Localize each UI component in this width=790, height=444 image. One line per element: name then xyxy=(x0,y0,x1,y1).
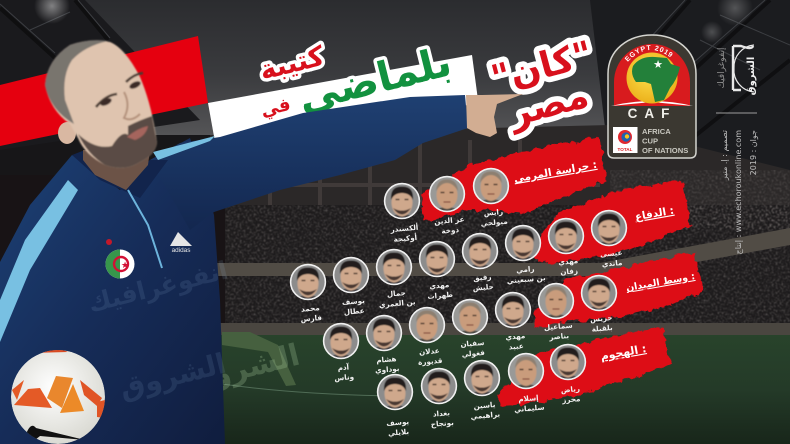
white banner xyxy=(208,55,478,142)
player: Adam Ounas xyxy=(323,323,359,383)
cup ball xyxy=(626,52,678,104)
player: Mohamed Fares: محمد xyxy=(301,303,320,314)
collar xyxy=(72,150,168,198)
player: Djamel Benlamri: بن العمري xyxy=(378,297,416,309)
player: Adam Ounas: آدم xyxy=(337,361,350,372)
zip xyxy=(128,190,162,268)
player: Djamel Benlamri xyxy=(376,249,416,309)
heading: حراسة المرمى : xyxy=(513,159,598,185)
football xyxy=(11,345,105,444)
player: Youcef Atal xyxy=(333,257,369,317)
title word: misr: مصر xyxy=(503,75,593,136)
heading: الهجوم : xyxy=(599,342,647,363)
player: Yacine Brahimi xyxy=(464,360,501,421)
player: Alexandre Oukidja: ألكسندر xyxy=(389,223,419,234)
coach figure xyxy=(0,40,523,444)
Algeria badge xyxy=(105,250,134,278)
shoulder stripe xyxy=(0,180,78,342)
player: Rais Mbolhi: رايس xyxy=(483,207,503,218)
player: Riyad Mahrez: رياض xyxy=(560,384,580,395)
player: Islam Slimani xyxy=(508,353,545,414)
EGYPT 2019 xyxy=(626,50,678,64)
arm stripe xyxy=(153,136,215,160)
player: Baghdad Bounedjah: بونجاح xyxy=(430,418,454,429)
Africa Cup of Nations label: AFRICA xyxy=(642,127,671,136)
player: Adlene Guedioura: عدلان xyxy=(419,346,440,357)
player: Haris Belkebla: حريس xyxy=(590,313,613,324)
adidas logo xyxy=(170,232,192,254)
player: Alexandre Oukidja xyxy=(384,183,420,244)
ear xyxy=(58,122,76,144)
player: Mohamed Fares: فارس xyxy=(300,313,323,324)
credit: date: جوان : 2019 xyxy=(749,130,758,175)
player: Mehdi Tahrat: مهدي xyxy=(429,280,450,291)
red brush stroke xyxy=(535,252,704,328)
neck xyxy=(83,150,150,190)
player: Sofiane Feghouli: سفيان xyxy=(460,338,485,349)
player: Yacine Brahimi: ياسين xyxy=(473,400,496,411)
logo text: infographic: إنفوغرافيك xyxy=(717,48,727,88)
player: Mehdi Zeffane xyxy=(548,218,584,277)
player: Yacine Brahimi: براهيمي xyxy=(470,410,501,421)
player: Ramy Bensebaini: بن سبعيني xyxy=(506,273,546,286)
player: Mehdi Abeid xyxy=(495,292,531,352)
heading: الدفاع : xyxy=(634,205,675,223)
watermark on pitch: الشروق xyxy=(182,338,303,400)
title: CAN Egypt xyxy=(487,34,597,136)
credit: production: إنتاج : www.echoroukonline.com xyxy=(734,130,744,254)
player: Rafik Halliche xyxy=(462,233,498,293)
credit: design: تصميم : إ. منير xyxy=(720,130,730,181)
player: Youcef Belaili: يوسف xyxy=(386,417,410,428)
watermark: الشروق xyxy=(116,347,229,405)
player: Youcef Atal: عطال xyxy=(343,306,365,317)
credits xyxy=(720,130,758,254)
player: Youcef Belaili xyxy=(377,374,413,438)
player: Azzedine Doukha: عز الدين xyxy=(434,215,465,226)
player: Ramy Bensebaini: رامي xyxy=(516,264,535,275)
player: Haris Belkebla: بلقبلة xyxy=(591,323,613,334)
player: Ismael Bennacer: بناصر xyxy=(548,331,570,342)
Africa Cup of Nations label: OF NATIONS xyxy=(642,146,688,155)
red brush stroke xyxy=(420,137,606,222)
title word: katiba: كتيبة xyxy=(257,41,328,87)
nose xyxy=(124,92,140,119)
player: Azzedine Doukha: دوخة xyxy=(441,225,460,236)
player: Islam Slimani: إسلام xyxy=(518,393,539,404)
watermark: انفوغرافيك xyxy=(85,255,231,319)
player: Mohamed Fares xyxy=(290,264,326,324)
Africa Cup of Nations label: CUP xyxy=(642,136,658,146)
player: Mehdi Abeid: مهدي xyxy=(505,331,526,342)
beard xyxy=(78,116,157,168)
title word: in: في xyxy=(259,94,293,121)
hair xyxy=(45,40,108,124)
player: Hicham Boudaoui: هشام xyxy=(376,354,397,365)
star: ★ xyxy=(653,59,663,71)
player: Azzedine Doukha xyxy=(429,176,466,236)
player: Haris Belkebla xyxy=(581,275,617,334)
player: Sofiane Feghouli: فغولي xyxy=(461,348,485,359)
player: Adlene Guedioura: قديورة xyxy=(418,356,443,367)
section: defence xyxy=(290,179,691,324)
adidas logo: adidas xyxy=(172,247,190,254)
player: Rais Mbolhi xyxy=(473,168,509,228)
player: Youcef Atal: يوسف xyxy=(342,296,365,307)
logo: CAF Africa Cup of Nations xyxy=(607,34,697,159)
player: Youcef Belaili: بلايلي xyxy=(388,427,410,438)
player: Djamel Benlamri: جمال xyxy=(386,288,406,299)
logo: CAF Africa Cup of Nations: EGYPT 2019 xyxy=(624,45,672,62)
player: Aissa Mandi: ماندي xyxy=(601,258,623,269)
player: Mehdi Zeffane: مهدي xyxy=(558,256,579,267)
player: Hicham Boudaoui: بوداوي xyxy=(375,364,400,375)
red banner xyxy=(0,36,208,146)
Africa map xyxy=(632,57,680,102)
title xyxy=(257,37,456,122)
mouth xyxy=(127,126,148,140)
section: midfield xyxy=(323,252,704,383)
player: Mehdi Tahrat: طهرات xyxy=(427,290,454,301)
pointing arm xyxy=(150,95,468,230)
player: Mehdi Tahrat xyxy=(419,241,455,301)
player: Riyad Mahrez xyxy=(550,344,586,405)
logo mark xyxy=(733,46,753,90)
player: Baghdad Bounedjah: بغداد xyxy=(433,408,451,419)
player: Aissa Mandi: عيسى xyxy=(600,248,623,259)
hand xyxy=(466,94,523,137)
player: Ismael Bennacer: سماعيل xyxy=(543,321,573,332)
player: Mehdi Abeid: عبيد xyxy=(508,341,524,351)
logo text: echorouk: الشروق xyxy=(746,57,757,95)
player: Adam Ounas: وناس xyxy=(334,372,354,383)
player: Rais Mbolhi: مبولحي xyxy=(480,217,508,228)
heading: وسط الميدان : xyxy=(625,271,696,294)
Total sponsor logo: TOTAL xyxy=(618,147,633,152)
player: Hicham Boudaoui xyxy=(366,315,402,375)
Africa Cup of Nations label xyxy=(642,127,688,155)
CAF: CAF xyxy=(628,106,676,121)
eyes and brows xyxy=(96,73,143,107)
player: Aissa Mandi xyxy=(591,210,627,269)
section: goalkeepers xyxy=(384,137,606,244)
player: Sofiane Feghouli xyxy=(452,299,488,359)
publisher logo xyxy=(717,45,757,95)
jacket body xyxy=(0,138,225,444)
player: Islam Slimani: سليماني xyxy=(514,403,545,414)
player: Mehdi Zeffane: زفان xyxy=(560,266,578,277)
section: attack xyxy=(377,326,671,438)
player: Adlene Guedioura xyxy=(409,307,445,367)
Algeria badge: ★ xyxy=(121,260,129,270)
watermark xyxy=(85,255,231,405)
red brush stroke xyxy=(528,179,691,264)
player: Ramy Bensebaini xyxy=(505,225,546,286)
player: Baghdad Bounedjah xyxy=(421,368,457,429)
red brush stroke xyxy=(497,326,671,406)
player: Rafik Halliche: رفيق xyxy=(473,272,492,283)
head xyxy=(45,40,157,168)
player: Ismael Bennacer xyxy=(538,283,574,342)
title word: Belmadi: بلماضي xyxy=(293,37,456,122)
player: Alexandre Oukidja: أوكيجة xyxy=(393,233,417,244)
player: Rafik Halliche: حليش xyxy=(472,282,494,293)
title word: kan: "كان" xyxy=(487,34,597,100)
player: Riyad Mahrez: محرز xyxy=(561,394,581,405)
